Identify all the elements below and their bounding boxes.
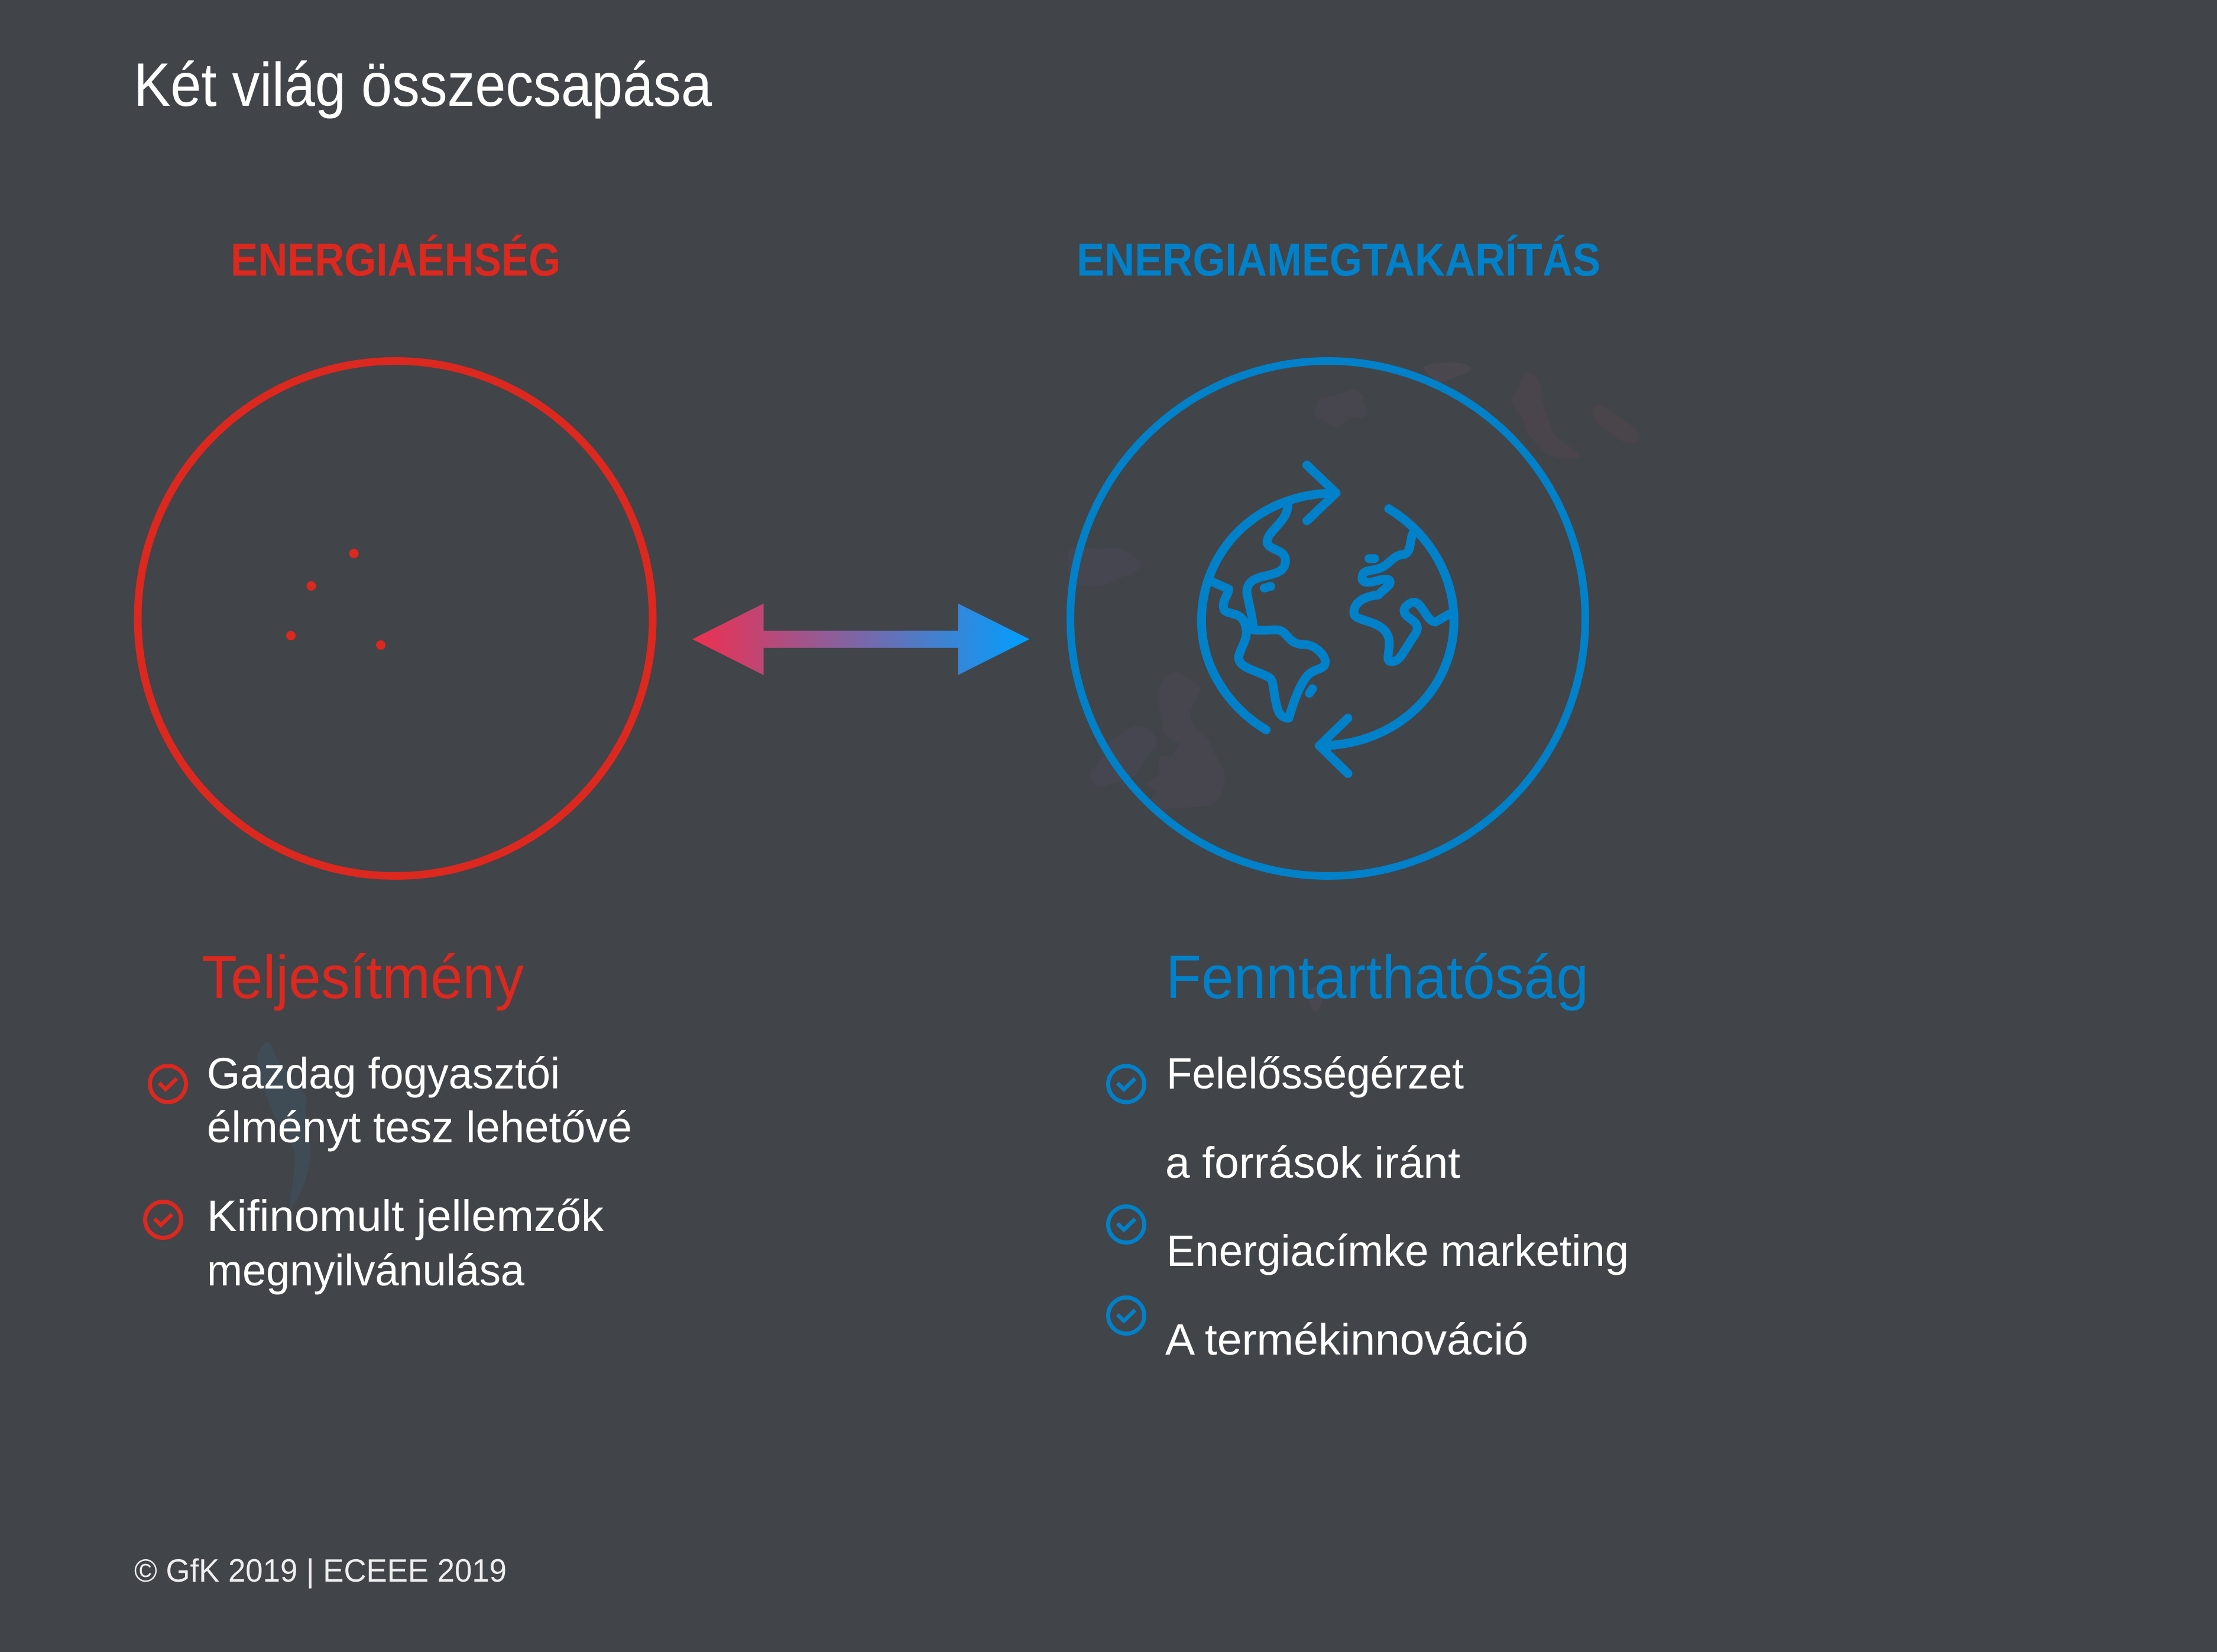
panel: energy hunger bbox=[138, 234, 653, 1295]
subheading: performance: Teljesítmény bbox=[202, 943, 524, 1011]
list item 1: élményt tesz lehetővé bbox=[207, 1103, 632, 1152]
list item 1: a források iránt bbox=[1165, 1138, 1460, 1187]
panel: energy saving bbox=[1070, 234, 1629, 1364]
heading: energy hunger: ENERGIAÉHSÉG bbox=[231, 234, 560, 286]
list item 1: Gazdag fogyasztói bbox=[207, 1049, 560, 1098]
faint background blobs bbox=[257, 362, 1638, 1210]
icon: blue circle bbox=[1070, 361, 1586, 876]
list item 3: A termékinnováció bbox=[1165, 1315, 1528, 1364]
list item 1: Felelősségérzet bbox=[1166, 1049, 1464, 1098]
heading: energy saving: ENERGIAMEGTAKARÍTÁS bbox=[1077, 234, 1600, 286]
check icon 2 bbox=[1108, 1206, 1145, 1243]
check icon 1 bbox=[1108, 1066, 1145, 1102]
list item 2: Kifinomult jellemzők bbox=[207, 1191, 604, 1240]
check icon 1 bbox=[150, 1066, 186, 1102]
list item 2 bbox=[207, 1191, 604, 1295]
list item 2: megnyilvánulása bbox=[207, 1246, 525, 1295]
check icon 3 bbox=[1108, 1297, 1145, 1334]
icon: globe with circular arrows bbox=[1201, 465, 1454, 773]
check icon 2 bbox=[145, 1201, 181, 1238]
double arrow bbox=[692, 604, 1030, 675]
list item 1 bbox=[1165, 1049, 1464, 1187]
subheading: sustainability: Fenntarthatóság bbox=[1166, 943, 1589, 1011]
icon: red circle with dots bbox=[138, 361, 653, 876]
title: Két világ összecsapása bbox=[134, 51, 712, 119]
footer: © GfK 2019 | ECEEE 2019 bbox=[134, 1552, 507, 1589]
list item 2: Energiacímke marketing bbox=[1166, 1226, 1629, 1275]
list item 1 bbox=[207, 1049, 632, 1152]
